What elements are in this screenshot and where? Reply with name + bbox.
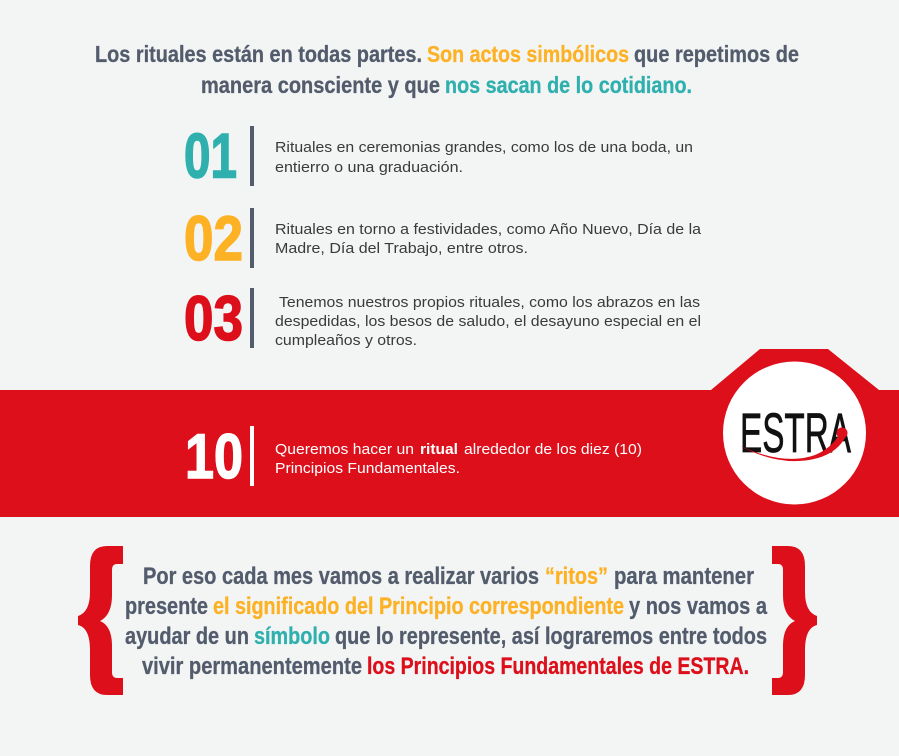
- item 03: cumpleaños y otros.: [275, 332, 417, 349]
- closing statement: el significado del Principio correspondiente: [213, 593, 624, 620]
- title: Son actos simbólicos: [427, 41, 629, 67]
- item 01: Rituales en ceremonias grandes, como los de una boda, un: [275, 139, 693, 156]
- closing statement: para mantener: [614, 563, 754, 590]
- item 03: Tenemos nuestros propios rituales, como los abrazos en las: [279, 294, 700, 311]
- item 01: 01: [184, 122, 237, 192]
- closing statement: Por eso cada mes vamos a realizar varios: [143, 563, 539, 590]
- item 02: 02: [184, 204, 243, 274]
- logo: ESTRA: [723, 362, 866, 504]
- title: que repetimos de: [634, 41, 799, 67]
- left brace: [78, 546, 123, 695]
- closing statement: vivir permanentemente: [142, 653, 362, 680]
- right brace: [772, 546, 817, 695]
- item 03: despedidas, los besos de saludo, el desayuno especial en el: [275, 313, 701, 330]
- item 02: Rituales en torno a festividades, como Año Nuevo, Día de la: [275, 221, 702, 238]
- item 01: [184, 122, 693, 192]
- closing statement: símbolo: [254, 623, 330, 650]
- item 10: [185, 422, 642, 492]
- closing statement: ayudar de un: [125, 623, 249, 650]
- item 02: Madre, Día del Trabajo, entre otros.: [275, 240, 528, 257]
- closing statement: [125, 563, 768, 680]
- title: Los rituales están en todas partes.: [95, 41, 422, 67]
- title: manera consciente y que: [201, 72, 440, 98]
- item 03: 03: [184, 284, 243, 354]
- closing statement: “ritos”: [545, 563, 608, 590]
- closing statement: los Principios Fundamentales de ESTRA.: [367, 653, 749, 680]
- item 10: ritual: [420, 441, 458, 458]
- item 10: Queremos hacer un: [275, 441, 414, 458]
- closing statement: presente: [125, 593, 208, 620]
- item 10: alrededor de los diez (10): [464, 441, 642, 458]
- item 01: entierro o una graduación.: [275, 159, 463, 176]
- closing statement: que lo represente, así lograremos entre todos: [335, 623, 767, 650]
- item 10: Principios Fundamentales.: [275, 460, 460, 477]
- title: [95, 41, 799, 98]
- title: nos sacan de lo cotidiano.: [445, 72, 692, 98]
- item 02: [184, 204, 702, 274]
- closing statement: y nos vamos a: [629, 593, 768, 620]
- red band: [0, 349, 899, 517]
- item 03: [184, 284, 701, 354]
- item 10: 10: [185, 422, 243, 492]
